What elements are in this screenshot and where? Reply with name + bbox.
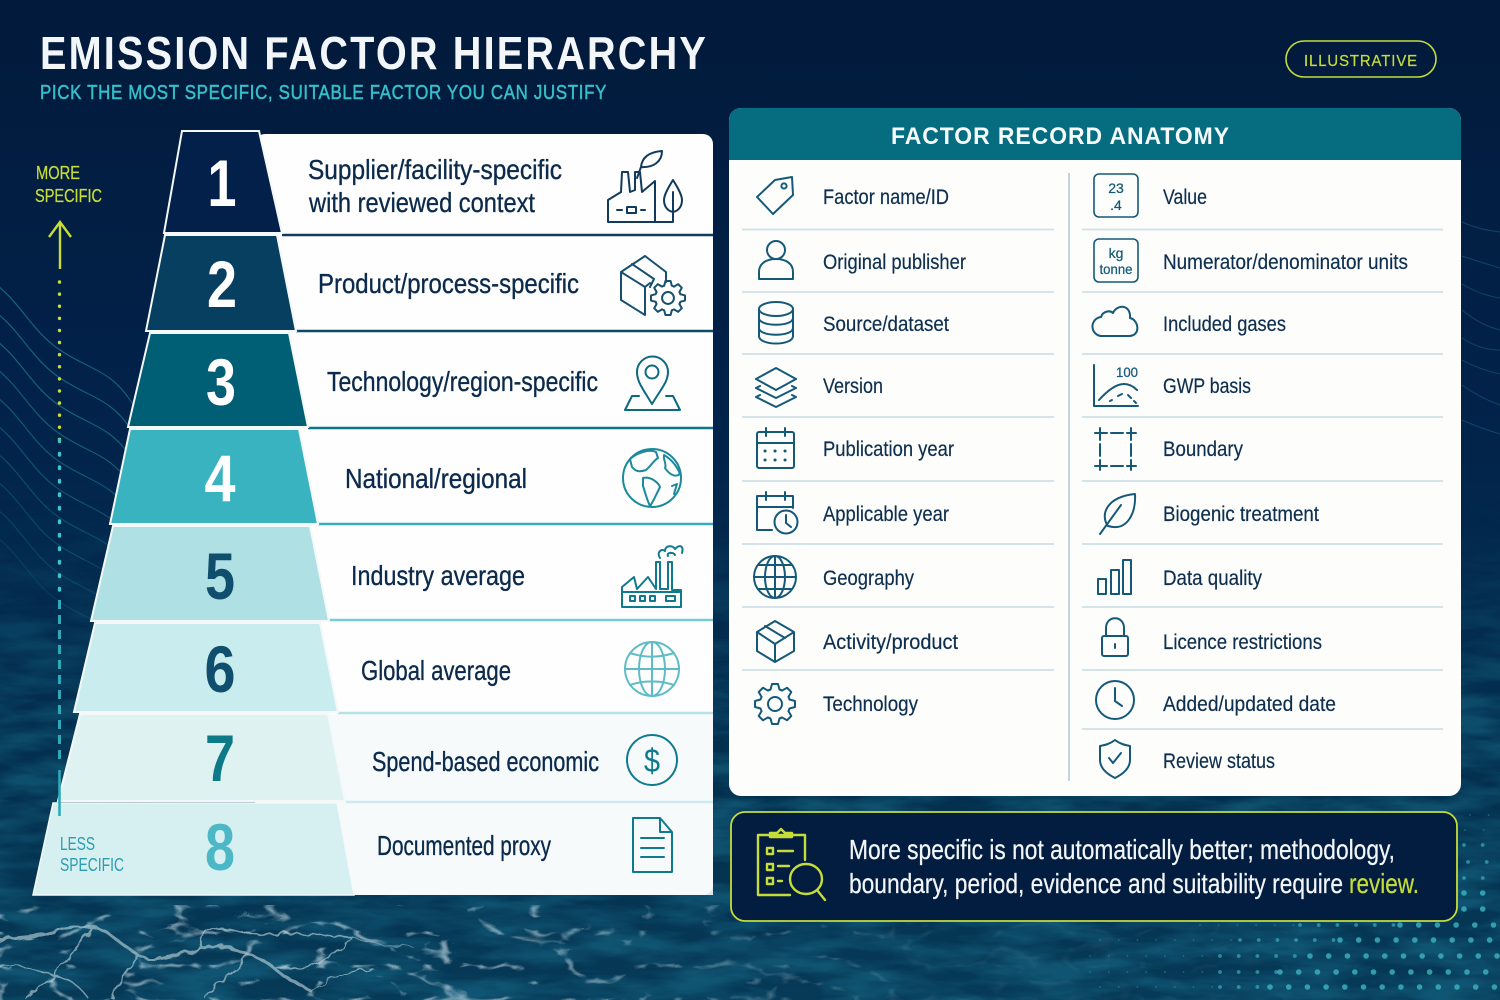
level 1 label — [308, 154, 562, 218]
row: numerator denominator units: tonne — [1100, 261, 1133, 277]
callout: review note — [731, 812, 1457, 921]
pyramid tier 7: 7 — [205, 721, 235, 795]
icon: factory with smoke — [622, 546, 683, 607]
subtitle: PICK THE MOST SPECIFIC, SUITABLE FACTOR YOU CAN JUSTIFY — [40, 82, 607, 104]
badge: illustrative: ILLUSTRATIVE — [1304, 53, 1418, 70]
background: ocean — [0, 222, 1500, 1000]
pyramid tier 5: 5 — [205, 539, 235, 613]
row: numerator denominator units: Numerator/denominator units — [1163, 251, 1408, 274]
row: GWP basis — [1094, 364, 1251, 406]
row: publication year — [757, 428, 954, 468]
pyramid tier 8 — [33, 803, 354, 895]
row: biogenic treatment — [1100, 494, 1319, 534]
row: version — [756, 368, 883, 407]
row: included gases: Included gases — [1163, 313, 1286, 336]
row: licence restrictions: Licence restrictions — [1163, 631, 1322, 654]
row: activity product — [757, 621, 958, 662]
pyramid tier 3 — [128, 333, 308, 427]
row: numerator denominator units — [1094, 239, 1408, 282]
callout: review note: review. — [1349, 868, 1419, 899]
icon: globe — [625, 642, 679, 696]
row: original publisher — [759, 241, 966, 279]
axis: more specific — [35, 163, 102, 760]
pyramid tier 8: 8 — [205, 810, 235, 884]
title: EMISSION FACTOR HIERARCHY — [40, 27, 708, 79]
pyramid tier 1: 1 — [208, 146, 236, 220]
icon: box with gear — [621, 256, 685, 315]
level 4 label: National/regional — [345, 463, 527, 494]
axis: less specific: LESS — [60, 834, 95, 854]
row: licence restrictions — [1102, 618, 1322, 656]
level 5 label: Industry average — [351, 560, 525, 591]
row: value: Value — [1163, 186, 1207, 209]
icon: dollar: $ — [644, 742, 660, 779]
icon: factory with leaf and tree — [608, 151, 682, 222]
decorative dot field — [1090, 815, 1500, 987]
row: activity product: Activity/product — [823, 631, 958, 654]
row: boundary — [1095, 428, 1243, 470]
row: source dataset: Source/dataset — [823, 313, 949, 336]
row: factor name: Factor name/ID — [823, 186, 949, 209]
row: GWP basis: 100 — [1116, 364, 1138, 380]
icon: document — [633, 818, 672, 872]
pyramid tier 7 — [58, 714, 345, 801]
row: value: .4 — [1110, 197, 1122, 213]
panel: factor record anatomy — [729, 108, 1461, 796]
level 2 label: Product/process-specific — [318, 268, 579, 299]
row: biogenic treatment: Biogenic treatment — [1163, 503, 1319, 526]
row: GWP basis: GWP basis — [1163, 375, 1251, 398]
row: value — [1094, 174, 1207, 217]
row: value: 23 — [1108, 180, 1124, 196]
row: applicable year — [757, 492, 949, 534]
row: geography: Geography — [823, 567, 914, 590]
row: numerator denominator units: kg — [1109, 245, 1123, 261]
pyramid tier 2 — [146, 235, 296, 331]
axis: more specific: MORE — [36, 163, 80, 183]
panel heading: FACTOR RECORD ANATOMY — [891, 123, 1230, 150]
pyramid tier 2: 2 — [207, 247, 237, 321]
level 6 label: Global average — [361, 655, 511, 686]
row: technology: Technology — [823, 693, 918, 716]
icon: location pin — [625, 356, 680, 410]
row: source dataset — [759, 302, 949, 344]
pyramid tier 1 — [164, 131, 282, 233]
pyramid tier 6: 6 — [204, 632, 236, 706]
row: publication year: Publication year — [823, 438, 954, 461]
icon: earth — [623, 449, 681, 507]
axis: less specific — [60, 770, 124, 875]
pyramid tier 4: 4 — [204, 441, 236, 515]
row: included gases — [1092, 307, 1286, 336]
row: geography — [754, 556, 914, 598]
pyramid tier 3: 3 — [206, 345, 236, 419]
pyramid tier 4 — [110, 429, 318, 524]
badge: illustrative — [1286, 41, 1436, 77]
pyramid tier 5 — [91, 526, 329, 621]
row: boundary: Boundary — [1163, 438, 1243, 461]
level 7 label: Spend-based economic — [372, 746, 599, 777]
axis: more specific: SPECIFIC — [35, 186, 102, 206]
level 1 label: Supplier/facility-specific — [308, 154, 562, 185]
pyramid tier 6 — [74, 623, 338, 712]
row: applicable year: Applicable year — [823, 503, 949, 526]
icon: dollar — [627, 735, 677, 785]
row: added updated date: Added/updated date — [1163, 693, 1336, 716]
row: version: Version — [823, 375, 883, 398]
axis: less specific: SPECIFIC — [60, 855, 124, 875]
level 1 label: with reviewed context — [308, 187, 535, 218]
row: factor name — [757, 177, 949, 214]
panel: hierarchy labels — [255, 134, 713, 895]
row: review status — [1100, 740, 1275, 778]
level 3 label: Technology/region-specific — [327, 366, 598, 397]
row: data quality — [1098, 560, 1262, 594]
row: technology — [755, 684, 918, 724]
row: added updated date — [1096, 681, 1336, 719]
icon: clipboard with magnifier — [758, 829, 825, 900]
level 8 label: Documented proxy — [377, 830, 551, 861]
callout: review note: boundary, period, evidence and suitability require — [849, 868, 1343, 899]
row: original publisher: Original publisher — [823, 251, 966, 274]
row: data quality: Data quality — [1163, 567, 1262, 590]
row: review status: Review status — [1163, 750, 1275, 773]
